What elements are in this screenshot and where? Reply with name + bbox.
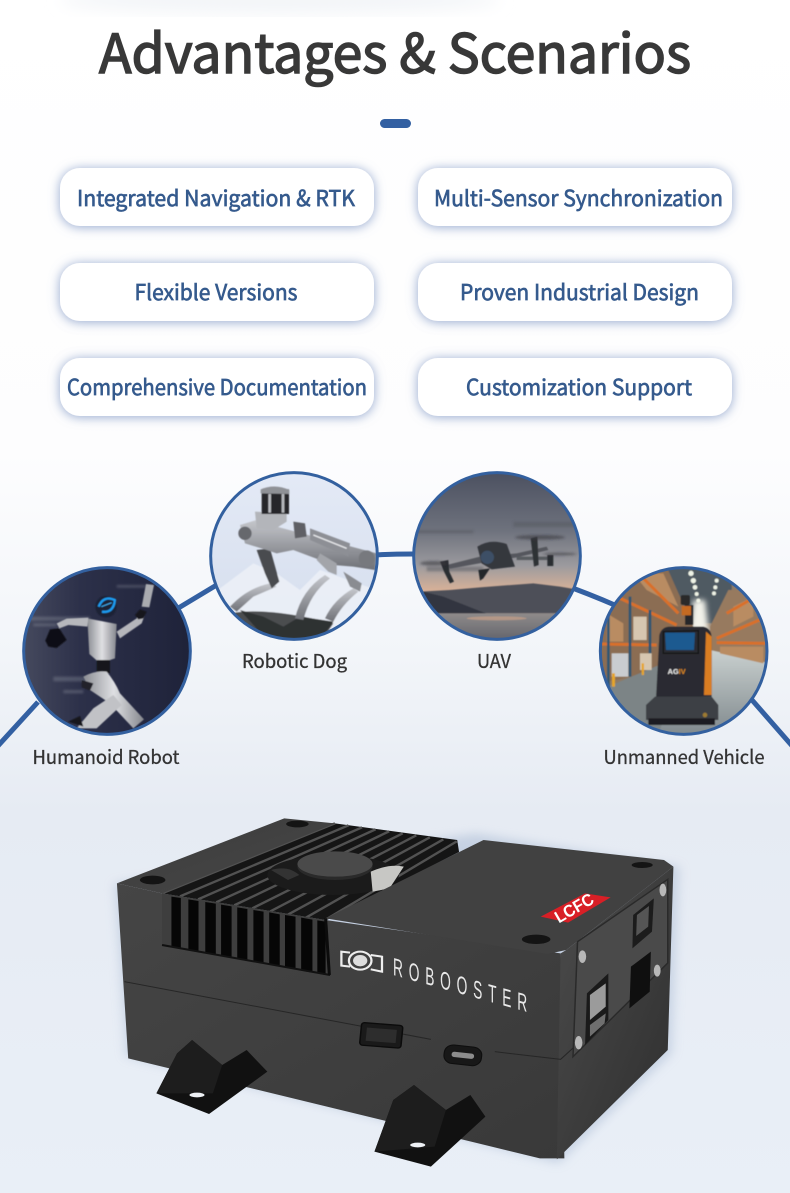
pill: comprehensive documentation: Comprehensive Documentation: [67, 371, 367, 402]
LCFC badge text: LCFC: [551, 890, 597, 927]
pill: integrated navigation: [60, 168, 374, 226]
pill: integrated navigation: Integrated Navigation & RTK: [77, 182, 355, 213]
label: UAV: UAV: [477, 647, 511, 674]
pill: proven industrial design: Proven Industrial Design: [460, 276, 699, 307]
connecting arc: [0, 554, 790, 748]
pill: customization support: Customization Support: [466, 371, 692, 402]
LCFC badge background: [541, 893, 611, 923]
pill: multi-sensor synchronization: [418, 168, 732, 226]
heatsink top: [162, 823, 459, 920]
scenario: humanoid robot: [20, 563, 193, 770]
title: Advantages & Scenarios: [99, 10, 691, 89]
label: robotic dog: Robotic Dog: [242, 647, 347, 674]
mounting holes: [140, 821, 653, 944]
pill: proven industrial design: [418, 263, 732, 321]
heatsink front slots: [162, 893, 330, 975]
rear IO panel: [573, 879, 668, 1057]
pill: flexible versions: Flexible Versions: [134, 276, 298, 307]
device body: [115, 818, 679, 1167]
photo: warehouse robot: [597, 563, 770, 737]
heatsink fins: [162, 823, 457, 920]
device right side: [557, 867, 673, 1159]
pill: multi-sensor synchronization: Multi-Sensor Synchronization: [434, 182, 723, 213]
photo: warehouse robot: AGIV: [668, 667, 686, 676]
left top plate: [117, 818, 335, 893]
USB-C port: [443, 1044, 483, 1067]
photo: robotic dog: [207, 470, 380, 643]
product: Robooster device: [115, 818, 679, 1167]
device front face: [117, 883, 564, 1158]
pill: flexible versions: [60, 263, 374, 321]
mounting bracket right: [374, 1085, 485, 1167]
brand name: ROBOOSTER: [393, 954, 527, 1018]
cooling fan: [267, 851, 404, 895]
label: unmanned vehicle: Unmanned Vehicle: [604, 743, 764, 770]
scenario: robotic dog: [207, 470, 380, 674]
label: humanoid robot: Humanoid Robot: [32, 743, 180, 770]
mounting bracket left: [156, 1040, 267, 1114]
seam line: [124, 962, 668, 1059]
scenario: unmanned vehicle: [597, 563, 770, 770]
advantages pills: [60, 168, 732, 416]
photo: UAV drone: [410, 470, 583, 643]
device shadow: [115, 833, 679, 1163]
top haze: [60, 0, 500, 14]
pill: comprehensive documentation: [60, 358, 374, 416]
title accent bar: [380, 119, 411, 128]
scenario: UAV: [410, 470, 583, 674]
pill: customization support: [418, 358, 732, 416]
DC power port: [360, 1022, 403, 1048]
photo: humanoid robot: [20, 563, 193, 737]
brand logo: [341, 952, 382, 972]
right top plate: [326, 840, 673, 954]
